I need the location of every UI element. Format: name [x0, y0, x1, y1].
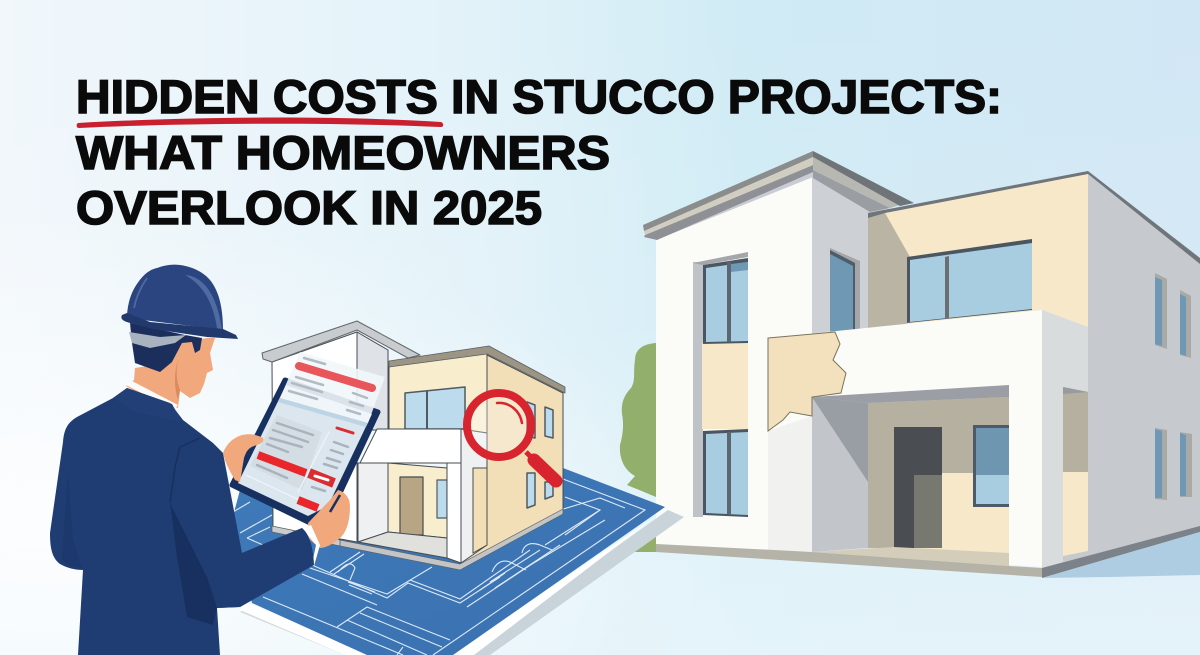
cream block front [389, 353, 487, 433]
large balcony window [907, 239, 1032, 323]
left roof [262, 321, 420, 362]
right hand [308, 490, 350, 548]
side roof edge [1088, 171, 1200, 264]
roof slab [643, 151, 914, 240]
left hand [223, 434, 263, 482]
tower front white wall [656, 177, 812, 552]
porch ceiling [812, 385, 1009, 403]
sheet blue [232, 468, 665, 655]
tablet screen [238, 385, 372, 516]
model side windows [527, 402, 553, 508]
sheet white border [450, 509, 667, 655]
ground shadow [1042, 532, 1200, 578]
blueprint sheet [232, 468, 684, 655]
lower wall panel [768, 416, 812, 552]
recess shadow [868, 213, 910, 330]
title: HIDDEN COSTS IN STUCCO PROJECTS: [76, 70, 1002, 123]
porch floor [812, 547, 1009, 566]
porch window [973, 425, 1009, 507]
front pillar [1009, 384, 1042, 567]
hat strap [129, 332, 186, 348]
tower side wall [812, 175, 892, 335]
porch inner left wall [812, 397, 868, 552]
middle tower window [830, 248, 860, 333]
shirt collar [124, 381, 178, 410]
base [340, 509, 563, 570]
pillar [447, 463, 461, 563]
right pillar side [1042, 310, 1088, 568]
base strip [656, 544, 1042, 577]
small house model [262, 321, 565, 570]
porch floor [358, 532, 447, 558]
cream block side [460, 355, 563, 567]
porch back wall [868, 397, 1009, 553]
screen rows [246, 423, 353, 508]
man inspecting estimate [50, 265, 313, 655]
sheet shadow [465, 510, 684, 655]
balcony front [360, 429, 462, 463]
neck shadow [175, 360, 180, 400]
right side wall [1042, 172, 1200, 577]
model door [400, 477, 423, 535]
hands and sleeve [210, 434, 350, 608]
left windows column [693, 252, 748, 517]
left block side [357, 332, 388, 430]
hair [130, 323, 202, 372]
tablet with cost estimate [232, 352, 385, 522]
tablet frame [232, 380, 378, 522]
title [76, 70, 1002, 234]
right recess [1063, 387, 1088, 556]
porch left wall [358, 463, 388, 542]
shirt cuff [302, 525, 320, 566]
upper recess cream wall [868, 172, 1088, 330]
icon: green tree behind house [620, 343, 656, 552]
red underline [77, 118, 443, 128]
door [894, 427, 942, 548]
recess roof edge [868, 171, 1088, 218]
floating estimate sheet [278, 352, 385, 427]
left block front [272, 332, 357, 542]
plan lines [233, 479, 645, 655]
title: WHAT HOMEOWNERS [76, 126, 610, 179]
hard hat [121, 265, 238, 348]
porch back wall [388, 463, 447, 538]
lower left window [703, 429, 748, 517]
cream block roof edge [389, 346, 565, 393]
icon: red magnifying glass [467, 393, 556, 481]
model porch window [437, 480, 447, 518]
upper left window [703, 258, 748, 344]
jacket shading [170, 503, 217, 625]
side windows [1155, 273, 1192, 500]
large stucco house [643, 151, 1200, 578]
jacket [50, 388, 313, 655]
neck and face [126, 338, 215, 408]
balcony beam front [768, 310, 1042, 400]
title: OVERLOOK IN 2025 [76, 181, 542, 234]
cracked stucco patch [768, 332, 846, 431]
forearm sleeve [210, 528, 314, 608]
upper window [405, 387, 465, 429]
